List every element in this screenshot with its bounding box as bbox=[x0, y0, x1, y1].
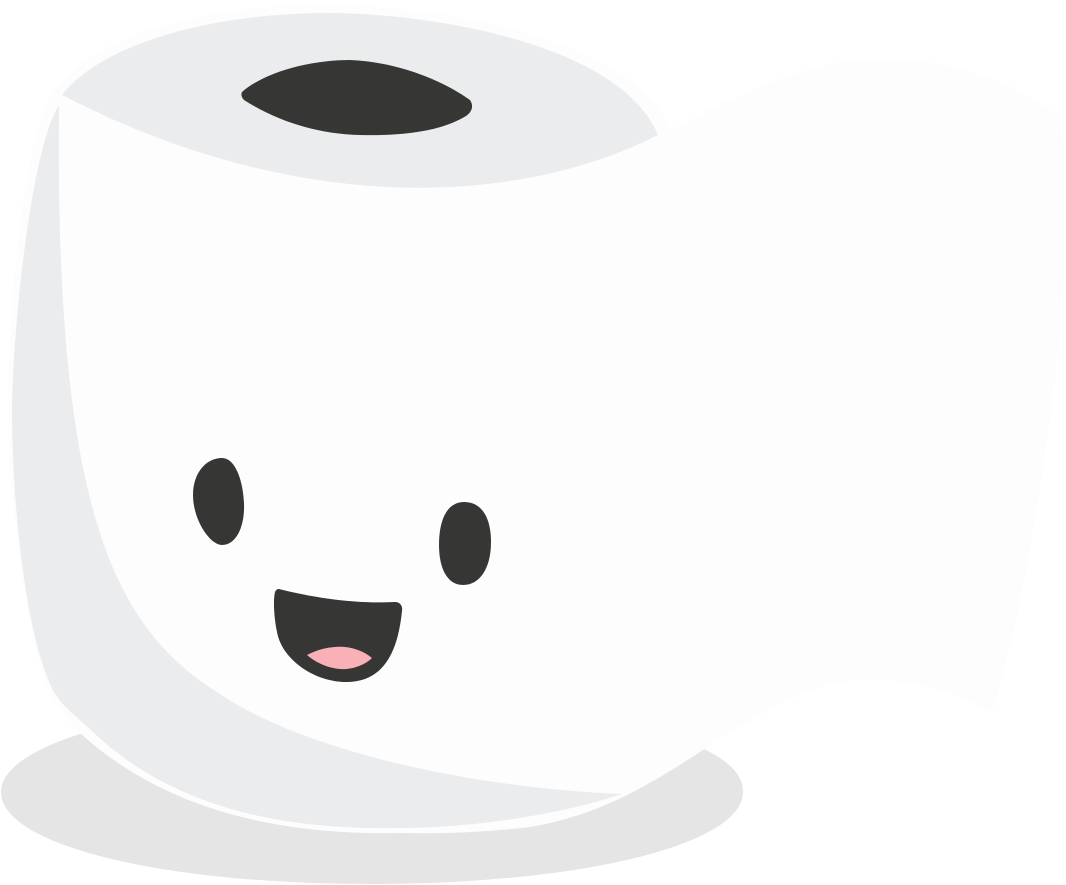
roll core hole bbox=[241, 60, 472, 135]
mouth bbox=[274, 589, 402, 682]
face bbox=[193, 458, 491, 682]
left eye bbox=[193, 458, 244, 545]
roll left side shading bbox=[12, 105, 622, 828]
roll top face bbox=[62, 13, 658, 188]
tongue bbox=[307, 647, 372, 669]
right eye bbox=[439, 502, 491, 585]
ground shadow bbox=[1, 700, 743, 884]
